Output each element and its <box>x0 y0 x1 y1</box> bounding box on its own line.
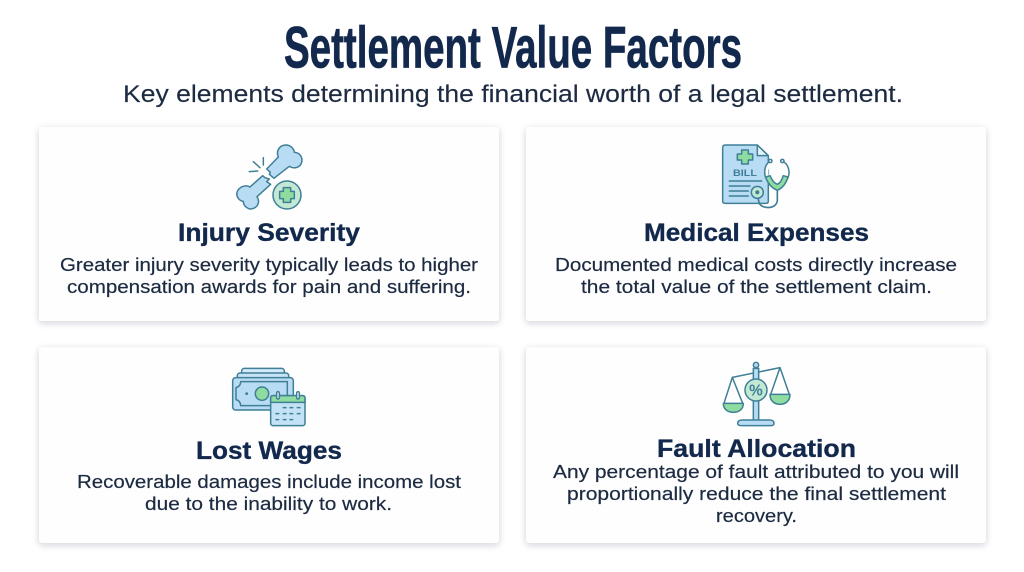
text: medical expenses description: Documented medical costs directly increase <box>555 254 957 275</box>
heading: injury severity: Injury Severity <box>178 219 360 247</box>
icon: scales with percent: % <box>749 383 763 400</box>
icon: medical bill and stethoscope: BILL <box>733 168 758 178</box>
panel: lost wages <box>39 347 499 543</box>
panel: fault allocation <box>526 347 986 543</box>
heading: medical expenses: Medical Expenses <box>644 219 869 247</box>
text: lost wages description: due to the inability to work. <box>145 493 392 514</box>
icon: broken bone <box>237 145 302 209</box>
text: medical expenses description: the total value of the settlement claim. <box>581 276 932 297</box>
text: lost wages description: Recoverable damages include income lost <box>77 471 461 492</box>
text: injury severity description: Greater injury severity typically leads to higher <box>60 254 478 275</box>
text: lost wages description <box>77 471 461 514</box>
text: fault allocation description: Any percentage of fault attributed to you will <box>553 461 959 482</box>
icon: scales with percent <box>723 362 790 426</box>
heading: fault allocation: Fault Allocation <box>657 435 856 463</box>
text: fault allocation description: proportionally reduce the final settlement <box>567 483 946 504</box>
panel: medical expenses <box>526 127 986 321</box>
text: medical expenses description <box>555 254 957 297</box>
text: injury severity description: compensation awards for pain and suffering. <box>67 276 471 297</box>
icon: cash and calendar <box>233 368 305 426</box>
title: Settlement Value Factors <box>284 16 742 80</box>
text: injury severity description <box>60 254 478 297</box>
panel: injury severity <box>39 127 499 321</box>
text: fault allocation description <box>553 461 959 526</box>
heading: lost wages: Lost Wages <box>196 437 342 465</box>
icon: medical bill and stethoscope <box>723 145 789 208</box>
text: fault allocation description: recovery. <box>716 505 797 526</box>
subtitle: Key elements determining the financial worth of a legal settlement. <box>123 81 903 108</box>
